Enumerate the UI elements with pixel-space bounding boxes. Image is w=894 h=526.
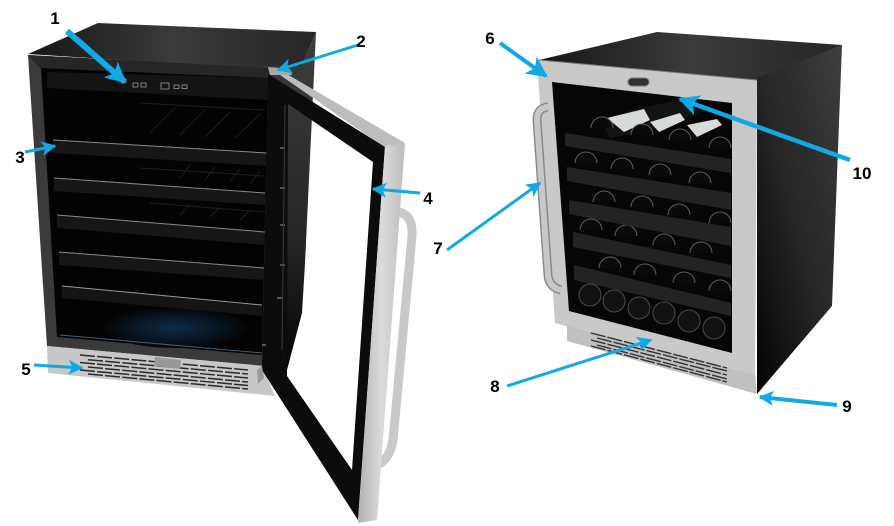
right cooler closed with bottles (537, 32, 842, 394)
door: hinge-side ticks (262, 105, 285, 350)
left cooler: side panel (262, 32, 316, 370)
label 6: 6 (485, 29, 495, 48)
door latch (154, 357, 181, 369)
arrow 8 (507, 340, 651, 386)
left cooler: top frame band (28, 55, 272, 78)
label 8: 8 (490, 377, 500, 396)
right cooler: window (552, 82, 732, 353)
door: stainless front (358, 143, 405, 523)
label 10: 10 (853, 164, 871, 183)
shelf 1 (53, 140, 267, 166)
right cooler: plinth (567, 326, 757, 394)
shelf 5 (62, 286, 262, 316)
label 3: 3 (15, 148, 25, 167)
arrow 1 (67, 31, 125, 82)
left cooler: interior (41, 68, 268, 355)
shelf 3 (57, 215, 265, 245)
label 9: 9 (842, 397, 852, 416)
lower hinge (257, 366, 264, 384)
arrow 9 (760, 397, 837, 405)
left cooler: front frame (28, 55, 272, 366)
label 2: 2 (356, 32, 366, 51)
arrow 7 (447, 183, 540, 250)
right cooler: handle (537, 107, 561, 290)
label 4: 4 (423, 189, 433, 208)
rack wires (140, 103, 265, 220)
right cooler: side panel (757, 45, 842, 394)
number labels (15, 9, 871, 416)
shelf 2 (54, 178, 265, 205)
left cooler with open door (28, 23, 412, 523)
arrow 5 (34, 365, 82, 368)
arrows (25, 31, 850, 405)
grille slots (80, 355, 248, 389)
top bottles (600, 98, 722, 138)
arrow 4 (373, 189, 420, 193)
bottom row bottles (579, 284, 725, 339)
left cooler: grille plinth (47, 346, 275, 396)
control panel: display icons (133, 83, 187, 89)
shelf 4 (59, 252, 264, 280)
shelves (565, 133, 731, 316)
left cooler: control panel band (47, 72, 268, 100)
door: gasket frame (262, 74, 385, 520)
label 5: 5 (21, 360, 31, 379)
label 1: 1 (50, 9, 60, 28)
door: stainless top edge (270, 68, 405, 148)
right cooler: frame top edge (539, 60, 757, 80)
door handle (379, 212, 412, 464)
bottle ends (575, 117, 731, 291)
left cooler: top panel (28, 23, 316, 70)
arrow 6 (500, 43, 546, 76)
right cooler: top panel (539, 32, 842, 80)
right cooler: stainless door frame (537, 60, 757, 381)
label 7: 7 (433, 239, 443, 258)
arrow 3 (25, 146, 55, 152)
arrow 2 (278, 45, 358, 70)
left cooler: blue light glow (105, 308, 245, 348)
arrow 10 (680, 99, 850, 160)
right grille slots (591, 333, 727, 382)
logo badge (628, 78, 649, 86)
bottom edge line (60, 335, 262, 353)
hinge (268, 67, 292, 75)
